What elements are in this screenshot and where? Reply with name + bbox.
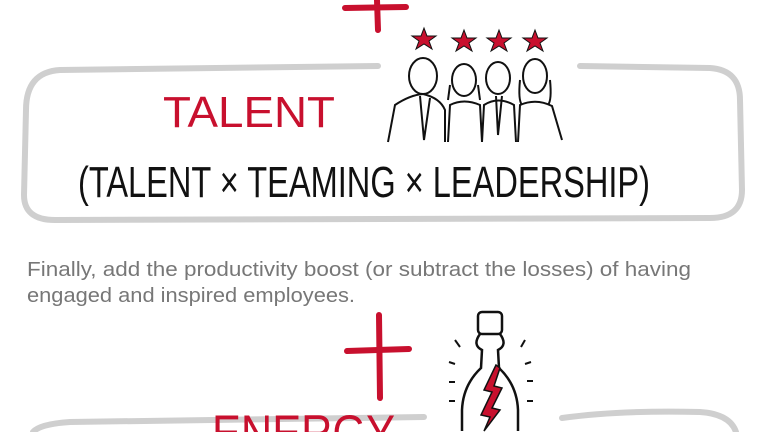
- text: engaged and inspired employees.: [27, 285, 355, 307]
- text block: paragraph: Finally, add the productivity boost (or subtract the losses) of having: [27, 259, 691, 281]
- panel: energy box: [33, 412, 736, 432]
- heading: TALENT: TALENT: [163, 88, 335, 137]
- panel: talent box: [24, 66, 742, 220]
- icon: red plus middle: [347, 315, 409, 398]
- icon: team with stars: [388, 28, 562, 142]
- icon: bottle with lightning: [449, 312, 533, 431]
- icon: red plus top: [345, 0, 406, 30]
